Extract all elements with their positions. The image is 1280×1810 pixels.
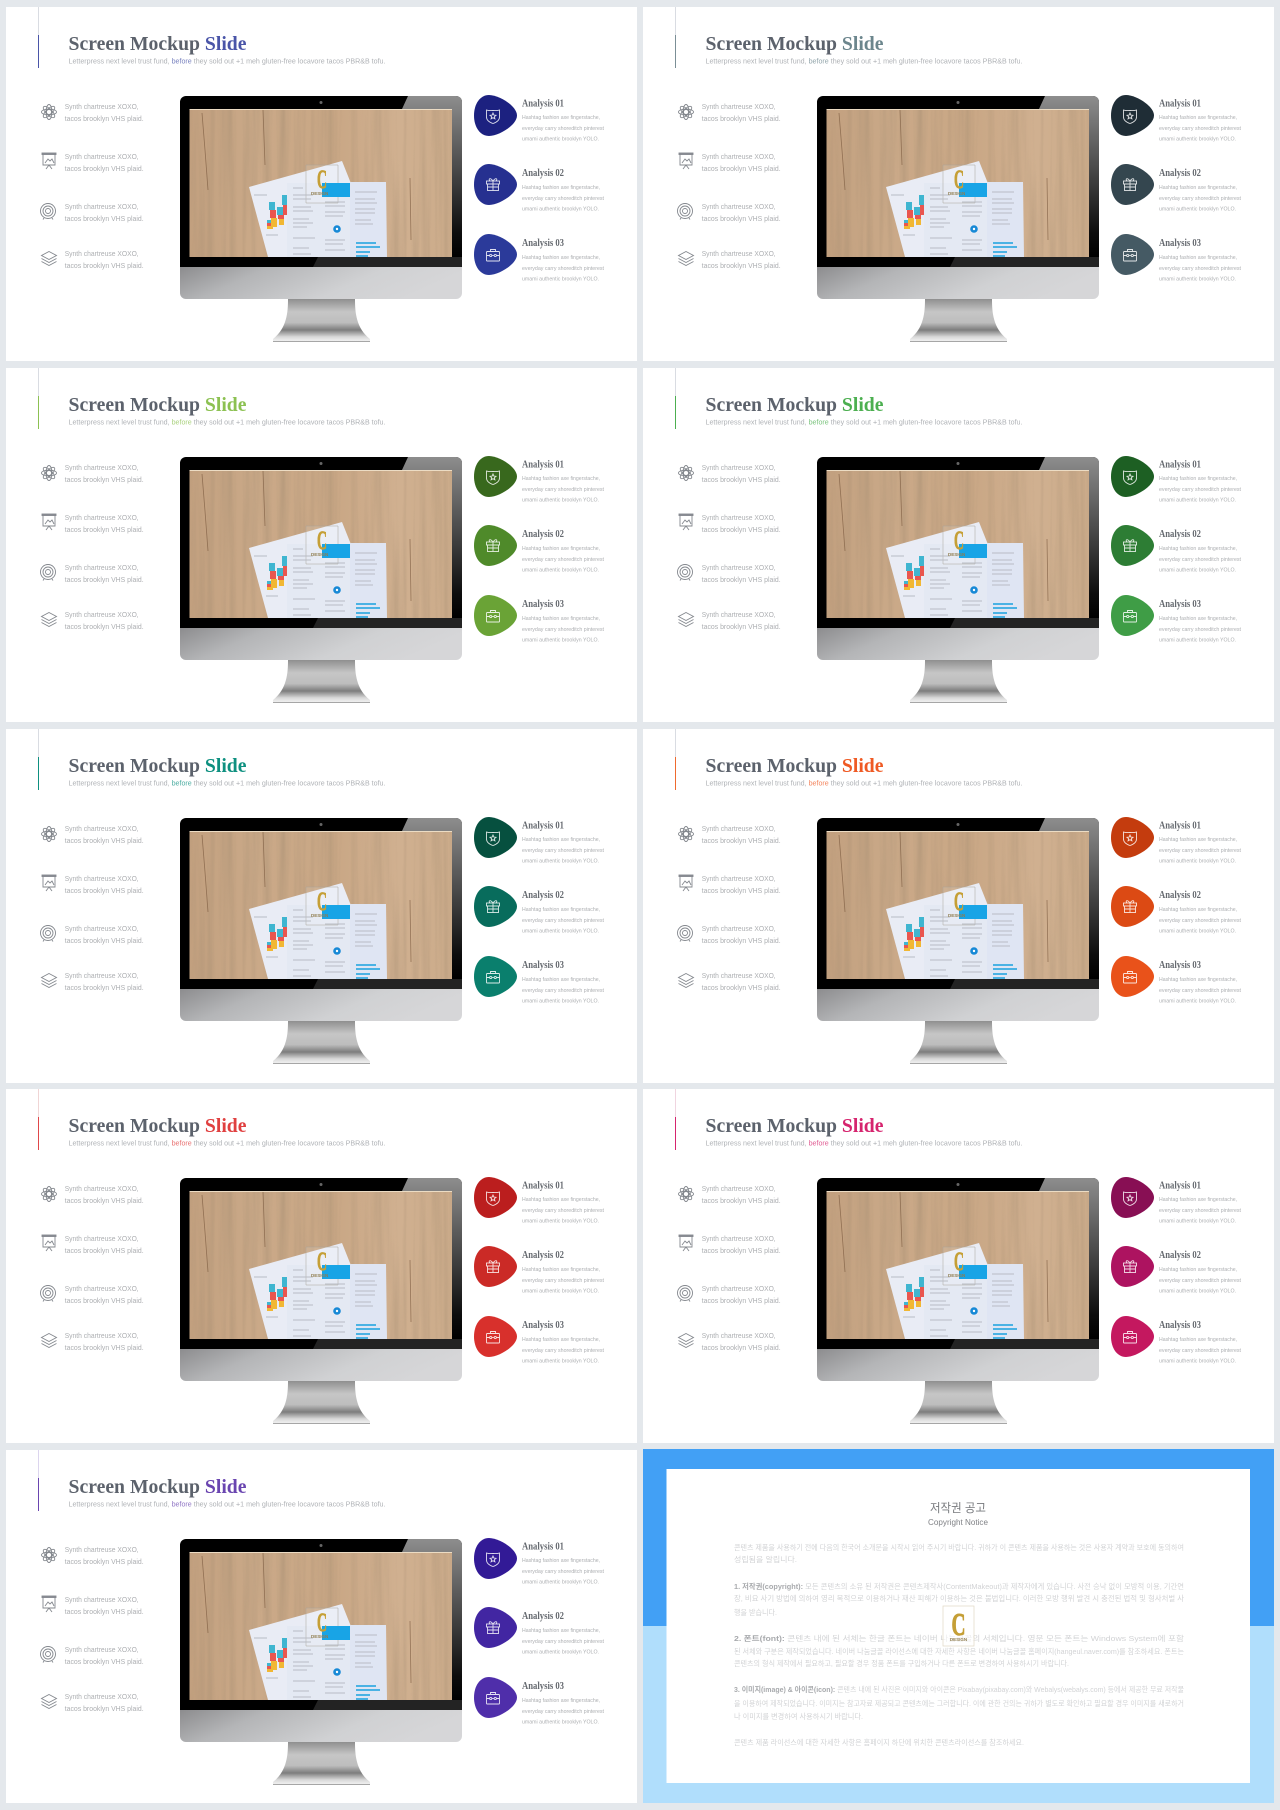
analysis list: Analysis 01 xyxy=(522,820,564,832)
feature list: tacos brooklyn VHS plaid. xyxy=(65,622,144,631)
notice intro: 성립됨을 알립니다. xyxy=(734,1555,797,1564)
notice: image and icon: 을 이용하여 제작되었습니다. 이미지는 참고자료 제공되고 콘텐츠에는 그러합니다. 이에 관한 건의는 귀하가 별도로 확인하고 필요할 경우 이미지를 새로하거 xyxy=(734,1698,1184,1708)
feature list: tacos brooklyn VHS plaid. xyxy=(65,214,144,223)
panel: copyright notice xyxy=(643,1449,1274,1803)
analysis list: Hashtag fashion axe fingerstache, xyxy=(522,255,600,261)
analysis list: Analysis 01 xyxy=(1159,98,1201,110)
analysis list: everyday carry shoreditch pinterest xyxy=(1159,126,1241,132)
analysis list: everyday carry shoreditch pinterest xyxy=(522,487,604,493)
analysis list: Hashtag fashion axe fingerstache, xyxy=(522,185,600,191)
logo: gold C xyxy=(943,1606,974,1646)
analysis list: everyday carry shoreditch pinterest xyxy=(1159,988,1241,994)
subtitle: Letterpress next level trust fund, before they sold out +1 meh gluten-free locavore tacos PBR&B tofu. xyxy=(68,418,386,426)
accent rule xyxy=(38,368,39,429)
feature list: Synth chartreuse XOXO, xyxy=(702,563,776,572)
analysis list: Hashtag fashion axe fingerstache, xyxy=(1159,837,1237,843)
title: Screen Mockup Slide xyxy=(706,755,884,777)
panel: slide 9 purple xyxy=(6,1450,637,1803)
analysis list: umami authentic brooklyn YOLO. xyxy=(1159,1218,1236,1224)
analysis list: umami authentic brooklyn YOLO. xyxy=(1159,498,1236,504)
analysis list: Analysis 01 xyxy=(522,460,564,470)
analysis list: everyday carry shoreditch pinterest xyxy=(522,1208,604,1214)
feature list: Synth chartreuse XOXO, xyxy=(702,1331,776,1340)
feature list: Synth chartreuse XOXO, xyxy=(65,1692,139,1701)
feature list: tacos brooklyn VHS plaid. xyxy=(702,575,781,584)
monitor mockup xyxy=(180,1539,462,1785)
analysis list: Analysis 03 xyxy=(522,1681,564,1692)
feature list: tacos brooklyn VHS plaid. xyxy=(65,1296,144,1305)
analysis list: umami authentic brooklyn YOLO. xyxy=(522,1218,599,1224)
analysis list: Analysis 01 xyxy=(1159,1180,1201,1192)
analysis list: umami authentic brooklyn YOLO. xyxy=(522,928,599,934)
analysis list: umami authentic brooklyn YOLO. xyxy=(1159,206,1236,212)
analysis list: Hashtag fashion axe fingerstache, xyxy=(1159,476,1237,482)
analysis list: everyday carry shoreditch pinterest xyxy=(522,1278,604,1284)
feature list: Synth chartreuse XOXO, xyxy=(65,563,139,572)
feature list xyxy=(40,102,144,270)
feature list: Synth chartreuse XOXO, xyxy=(702,249,776,258)
analysis list: everyday carry shoreditch pinterest xyxy=(522,557,604,563)
analysis list: Hashtag fashion axe fingerstache, xyxy=(522,907,600,913)
notice: copyright: 장, 비요 사기 방법에 의하여 영리 목적으로 이용하거나 재산 피해가 이용하는 것은 불법입니다. 이러한 모방 행위 발견 시 충전된 법적 및 형사처벌 사 xyxy=(734,1593,1184,1603)
analysis list: everyday carry shoreditch pinterest xyxy=(1159,918,1241,924)
logo: gold C: DESIGN xyxy=(950,1637,967,1642)
analysis list: everyday carry shoreditch pinterest xyxy=(1159,627,1241,633)
analysis list xyxy=(474,456,604,644)
title: Screen Mockup Slide xyxy=(706,1115,884,1137)
logo: gold C: C xyxy=(952,1606,966,1642)
analysis list xyxy=(1111,817,1241,1004)
analysis list: everyday carry shoreditch pinterest xyxy=(522,196,604,202)
analysis list: everyday carry shoreditch pinterest xyxy=(522,988,604,994)
feature list: tacos brooklyn VHS plaid. xyxy=(702,261,781,270)
title: Screen Mockup Slide xyxy=(706,394,884,416)
feature list: Synth chartreuse XOXO, xyxy=(65,1234,139,1243)
title: Screen Mockup Slide xyxy=(706,33,884,55)
analysis list: Hashtag fashion axe fingerstache, xyxy=(522,1628,600,1634)
analysis list: everyday carry shoreditch pinterest xyxy=(522,126,604,132)
analysis list: everyday carry shoreditch pinterest xyxy=(522,1639,604,1645)
feature list: Synth chartreuse XOXO, xyxy=(65,610,139,619)
feature list: tacos brooklyn VHS plaid. xyxy=(65,475,144,484)
analysis list: umami authentic brooklyn YOLO. xyxy=(522,1650,599,1656)
analysis list: everyday carry shoreditch pinterest xyxy=(1159,1278,1241,1284)
panel: slide 6 orange xyxy=(643,729,1274,1083)
analysis list: umami authentic brooklyn YOLO. xyxy=(522,136,599,142)
analysis list: Analysis 02 xyxy=(522,890,564,901)
analysis list: umami authentic brooklyn YOLO. xyxy=(522,998,599,1004)
analysis list: umami authentic brooklyn YOLO. xyxy=(1159,928,1236,934)
notice: copyright: 행을 받습니다. xyxy=(734,1607,777,1617)
analysis list: Hashtag fashion axe fingerstache, xyxy=(522,616,600,622)
analysis list: Hashtag fashion axe fingerstache, xyxy=(522,1197,600,1203)
analysis list: Analysis 01 xyxy=(1159,460,1201,470)
feature list xyxy=(678,102,781,270)
subtitle: Letterpress next level trust fund, before they sold out +1 meh gluten-free locavore tacos PBR&B tofu. xyxy=(706,418,1022,426)
feature list: Synth chartreuse XOXO, xyxy=(65,1184,139,1193)
feature list: Synth chartreuse XOXO, xyxy=(65,824,139,833)
analysis list: Analysis 01 xyxy=(522,98,564,110)
notice heading: 저작권 공고 xyxy=(930,1501,986,1515)
feature list: Synth chartreuse XOXO, xyxy=(65,874,139,883)
analysis list: umami authentic brooklyn YOLO. xyxy=(522,1288,599,1294)
analysis list: Analysis 02 xyxy=(1159,168,1201,179)
analysis list: Hashtag fashion axe fingerstache, xyxy=(522,1337,600,1343)
feature list: Synth chartreuse XOXO, xyxy=(65,1284,139,1293)
subtitle: Letterpress next level trust fund, before they sold out +1 meh gluten-free locavore tacos PBR&B tofu. xyxy=(68,1138,386,1148)
analysis list: Hashtag fashion axe fingerstache, xyxy=(522,546,600,552)
analysis list: Hashtag fashion axe fingerstache, xyxy=(1159,907,1237,913)
feature list: tacos brooklyn VHS plaid. xyxy=(702,1246,781,1255)
feature list: Synth chartreuse XOXO, xyxy=(65,1331,139,1340)
analysis list: umami authentic brooklyn YOLO. xyxy=(1159,998,1236,1004)
feature list: Synth chartreuse XOXO, xyxy=(65,971,139,980)
analysis list: Hashtag fashion axe fingerstache, xyxy=(522,1558,600,1564)
analysis list: umami authentic brooklyn YOLO. xyxy=(1159,1358,1236,1364)
analysis list: umami authentic brooklyn YOLO. xyxy=(522,858,599,864)
accent rule xyxy=(675,1089,676,1150)
feature list: tacos brooklyn VHS plaid. xyxy=(65,1343,144,1352)
analysis list: everyday carry shoreditch pinterest xyxy=(1159,1348,1241,1354)
notice intro: 콘텐츠 제품을 사용하기 전에 다음의 한국어 소개문을 시작시 읽어 주시기 바랍니다. 귀하가 이 콘텐츠 제품을 사용하는 것은 사용자 계약과 보호에 동의하여 xyxy=(734,1542,1184,1552)
notice: font: 된 서체와 구분은 제작되었습니다. 네이버 나눔글꼴 라이선스에 대한 자세한 사항은 네이버 나눔글꼴 홈페이지(hangeul.naver.com)를 참조하세요. 폰트는 xyxy=(734,1646,1184,1656)
analysis list: everyday carry shoreditch pinterest xyxy=(1159,848,1241,854)
analysis list: everyday carry shoreditch pinterest xyxy=(522,266,604,272)
analysis list: Analysis 03 xyxy=(522,238,564,249)
monitor mockup xyxy=(180,457,462,703)
feature list: Synth chartreuse XOXO, xyxy=(65,1545,139,1554)
feature list: tacos brooklyn VHS plaid. xyxy=(65,836,144,845)
feature list: tacos brooklyn VHS plaid. xyxy=(65,261,144,270)
notice intro xyxy=(734,1542,1184,1564)
feature list: Synth chartreuse XOXO, xyxy=(65,202,139,211)
feature list: Synth chartreuse XOXO, xyxy=(702,513,776,522)
analysis list xyxy=(1111,1177,1241,1364)
feature list: tacos brooklyn VHS plaid. xyxy=(702,1296,781,1305)
accent rule xyxy=(675,729,676,790)
feature list: tacos brooklyn VHS plaid. xyxy=(65,1657,144,1666)
feature list: Synth chartreuse XOXO, xyxy=(65,249,139,258)
monitor mockup xyxy=(817,818,1099,1064)
analysis list: umami authentic brooklyn YOLO. xyxy=(1159,638,1236,644)
analysis list: everyday carry shoreditch pinterest xyxy=(522,918,604,924)
feature list: Synth chartreuse XOXO, xyxy=(65,513,139,522)
feature list xyxy=(40,463,144,631)
feature list: Synth chartreuse XOXO, xyxy=(702,1284,776,1293)
feature list: tacos brooklyn VHS plaid. xyxy=(65,525,144,534)
analysis list: Hashtag fashion axe fingerstache, xyxy=(522,977,600,983)
feature list: tacos brooklyn VHS plaid. xyxy=(702,886,781,895)
accent rule xyxy=(675,7,676,68)
subtitle: Letterpress next level trust fund, before they sold out +1 meh gluten-free locavore tacos PBR&B tofu. xyxy=(68,1500,386,1508)
feature list: Synth chartreuse XOXO, xyxy=(702,874,776,883)
analysis list: everyday carry shoreditch pinterest xyxy=(1159,487,1241,493)
analysis list: umami authentic brooklyn YOLO. xyxy=(1159,1288,1236,1294)
panel: slide 3 lime xyxy=(6,368,637,722)
panel: slide 4 green xyxy=(643,368,1274,722)
analysis list: Analysis 02 xyxy=(522,529,564,540)
subtitle: Letterpress next level trust fund, before they sold out +1 meh gluten-free locavore tacos PBR&B tofu. xyxy=(706,778,1022,788)
notice: font: 2. 폰트(font): 콘텐츠 내에 된 서체는 한글 폰트는 네이버 나눔글꼴의 서체입니다. 영문 모든 폰트는 Windows System에 포함 xyxy=(734,1633,1184,1643)
analysis list: everyday carry shoreditch pinterest xyxy=(1159,266,1241,272)
title: Screen Mockup Slide xyxy=(68,1476,247,1498)
analysis list: Analysis 03 xyxy=(1159,599,1201,610)
analysis list: Hashtag fashion axe fingerstache, xyxy=(1159,616,1237,622)
accent rule xyxy=(38,1450,39,1511)
panel: slide 5 teal xyxy=(6,729,637,1083)
analysis list: Hashtag fashion axe fingerstache, xyxy=(1159,185,1237,191)
subtitle: Letterpress next level trust fund, before they sold out +1 meh gluten-free locavore tacos PBR&B tofu. xyxy=(706,56,1022,66)
panel: slide 1 navy xyxy=(6,7,637,361)
analysis list: umami authentic brooklyn YOLO. xyxy=(1159,136,1236,142)
feature list: Synth chartreuse XOXO, xyxy=(702,1234,776,1243)
analysis list: Analysis 02 xyxy=(522,1611,564,1622)
analysis list: Hashtag fashion axe fingerstache, xyxy=(1159,115,1237,121)
feature list: Synth chartreuse XOXO, xyxy=(702,610,776,619)
analysis list: Analysis 03 xyxy=(522,1320,564,1331)
analysis list: Hashtag fashion axe fingerstache, xyxy=(1159,1267,1237,1273)
analysis list: umami authentic brooklyn YOLO. xyxy=(522,1358,599,1364)
analysis list: umami authentic brooklyn YOLO. xyxy=(1159,858,1236,864)
feature list: Synth chartreuse XOXO, xyxy=(702,924,776,933)
analysis list: Hashtag fashion axe fingerstache, xyxy=(522,837,600,843)
analysis list: Analysis 01 xyxy=(1159,820,1201,832)
analysis list: Analysis 02 xyxy=(522,168,564,179)
analysis list: Hashtag fashion axe fingerstache, xyxy=(1159,546,1237,552)
analysis list: Analysis 03 xyxy=(1159,238,1201,249)
feature list xyxy=(678,1184,781,1352)
feature list: tacos brooklyn VHS plaid. xyxy=(65,575,144,584)
analysis list: umami authentic brooklyn YOLO. xyxy=(1159,276,1236,282)
feature list: Synth chartreuse XOXO, xyxy=(65,924,139,933)
analysis list: Analysis 03 xyxy=(522,599,564,610)
analysis list xyxy=(474,1538,604,1726)
panel: slide 8 magenta xyxy=(643,1089,1274,1443)
feature list: tacos brooklyn VHS plaid. xyxy=(65,1607,144,1616)
title: Screen Mockup Slide xyxy=(68,33,247,55)
feature list: Synth chartreuse XOXO, xyxy=(702,102,776,111)
notice: image and icon xyxy=(734,1684,1184,1721)
analysis list: Analysis 03 xyxy=(1159,960,1201,971)
analysis list xyxy=(474,1177,604,1364)
subtitle: Letterpress next level trust fund, before they sold out +1 meh gluten-free locavore tacos PBR&B tofu. xyxy=(706,1138,1022,1148)
panel: slide 2 slate xyxy=(643,7,1274,361)
feature list: Synth chartreuse XOXO, xyxy=(65,152,139,161)
feature list: Synth chartreuse XOXO, xyxy=(65,1595,139,1604)
subtitle: Letterpress next level trust fund, before they sold out +1 meh gluten-free locavore tacos PBR&B tofu. xyxy=(68,778,386,788)
feature list: tacos brooklyn VHS plaid. xyxy=(65,1246,144,1255)
feature list: Synth chartreuse XOXO, xyxy=(702,152,776,161)
analysis list: everyday carry shoreditch pinterest xyxy=(522,1709,604,1715)
feature list: tacos brooklyn VHS plaid. xyxy=(702,525,781,534)
analysis list: Analysis 02 xyxy=(1159,1250,1201,1261)
feature list: tacos brooklyn VHS plaid. xyxy=(65,1196,144,1205)
feature list: tacos brooklyn VHS plaid. xyxy=(65,1557,144,1566)
feature list: tacos brooklyn VHS plaid. xyxy=(702,475,781,484)
analysis list: Analysis 01 xyxy=(522,1542,564,1552)
analysis list: umami authentic brooklyn YOLO. xyxy=(522,276,599,282)
title: Screen Mockup Slide xyxy=(68,394,247,416)
subtitle: Letterpress next level trust fund, before they sold out +1 meh gluten-free locavore tacos PBR&B tofu. xyxy=(68,56,386,66)
feature list xyxy=(678,824,781,992)
feature list: Synth chartreuse XOXO, xyxy=(702,463,776,472)
feature list: tacos brooklyn VHS plaid. xyxy=(65,983,144,992)
analysis list: Hashtag fashion axe fingerstache, xyxy=(1159,1197,1237,1203)
accent rule xyxy=(38,729,39,790)
feature list: tacos brooklyn VHS plaid. xyxy=(702,164,781,173)
analysis list xyxy=(1111,456,1241,644)
analysis list: Analysis 01 xyxy=(522,1180,564,1192)
feature list: tacos brooklyn VHS plaid. xyxy=(702,114,781,123)
feature list: Synth chartreuse XOXO, xyxy=(702,1184,776,1193)
analysis list xyxy=(474,817,604,1004)
analysis list: everyday carry shoreditch pinterest xyxy=(1159,196,1241,202)
feature list: tacos brooklyn VHS plaid. xyxy=(65,164,144,173)
monitor mockup xyxy=(180,818,462,1064)
analysis list: Analysis 02 xyxy=(1159,890,1201,901)
analysis list: Analysis 02 xyxy=(522,1250,564,1261)
feature list: Synth chartreuse XOXO, xyxy=(65,463,139,472)
analysis list: umami authentic brooklyn YOLO. xyxy=(522,206,599,212)
notice: copyright: 1. 저작권(copyright): 모든 콘텐츠의 소유 된 저작권은 콘텐츠제작사(ContentMakeout)과 제작자에게 있습니다. 사전 승낙 없이 모방적 이용, 기간연 xyxy=(734,1581,1184,1591)
title: Screen Mockup Slide xyxy=(68,1115,247,1137)
analysis list: umami authentic brooklyn YOLO. xyxy=(522,1580,599,1586)
analysis list: Hashtag fashion axe fingerstache, xyxy=(522,1698,600,1704)
analysis list xyxy=(1111,95,1241,282)
analysis list: Hashtag fashion axe fingerstache, xyxy=(522,1267,600,1273)
monitor mockup xyxy=(180,96,462,342)
notice: image and icon: 3. 이미지(image) & 아이콘(icon): 콘텐츠 내에 된 사진은 이미지와 아이콘은 Pixabay(pixabay.com)와 Webalys(webalys.com) 등에서 제공한 무료 저작물 xyxy=(734,1684,1184,1694)
analysis list: Hashtag fashion axe fingerstache, xyxy=(1159,255,1237,261)
feature list: tacos brooklyn VHS plaid. xyxy=(702,936,781,945)
analysis list: umami authentic brooklyn YOLO. xyxy=(522,1720,599,1726)
notice: font xyxy=(734,1633,1184,1668)
feature list: tacos brooklyn VHS plaid. xyxy=(65,1704,144,1713)
feature list: tacos brooklyn VHS plaid. xyxy=(65,936,144,945)
title: Screen Mockup Slide xyxy=(68,755,247,777)
feature list xyxy=(40,1545,144,1713)
analysis list: umami authentic brooklyn YOLO. xyxy=(522,568,599,574)
feature list: Synth chartreuse XOXO, xyxy=(702,971,776,980)
analysis list xyxy=(474,95,604,282)
analysis list: umami authentic brooklyn YOLO. xyxy=(522,638,599,644)
accent rule xyxy=(38,1089,39,1150)
analysis list: everyday carry shoreditch pinterest xyxy=(522,1348,604,1354)
analysis list: everyday carry shoreditch pinterest xyxy=(522,627,604,633)
panel: slide 7 red xyxy=(6,1089,637,1443)
accent rule xyxy=(38,7,39,68)
feature list xyxy=(40,824,144,992)
feature list: Synth chartreuse XOXO, xyxy=(65,102,139,111)
notice subheading: Copyright Notice xyxy=(928,1517,988,1527)
feature list: tacos brooklyn VHS plaid. xyxy=(702,983,781,992)
feature list: Synth chartreuse XOXO, xyxy=(702,202,776,211)
notice: font: 콘텐츠의 형식 제작에서 필요하고, 필요할 경우 정품 폰트를 구입하거나 다른 폰트로 변경하여 사용하시기 바랍니다. xyxy=(734,1658,1069,1668)
analysis list: Hashtag fashion axe fingerstache, xyxy=(522,476,600,482)
accent rule xyxy=(675,368,676,429)
analysis list: Hashtag fashion axe fingerstache, xyxy=(1159,977,1237,983)
feature list: Synth chartreuse XOXO, xyxy=(702,824,776,833)
feature list: tacos brooklyn VHS plaid. xyxy=(702,214,781,223)
feature list xyxy=(40,1184,144,1352)
analysis list: everyday carry shoreditch pinterest xyxy=(522,1569,604,1575)
feature list: tacos brooklyn VHS plaid. xyxy=(702,836,781,845)
feature list: tacos brooklyn VHS plaid. xyxy=(65,886,144,895)
analysis list: everyday carry shoreditch pinterest xyxy=(1159,557,1241,563)
monitor mockup xyxy=(180,1178,462,1424)
monitor mockup xyxy=(817,457,1099,703)
analysis list: Analysis 03 xyxy=(1159,1320,1201,1331)
analysis list: Analysis 03 xyxy=(522,960,564,971)
analysis list: Analysis 02 xyxy=(1159,529,1201,540)
analysis list: everyday carry shoreditch pinterest xyxy=(1159,1208,1241,1214)
analysis list: umami authentic brooklyn YOLO. xyxy=(522,498,599,504)
analysis list: Hashtag fashion axe fingerstache, xyxy=(522,115,600,121)
feature list: tacos brooklyn VHS plaid. xyxy=(702,1343,781,1352)
analysis list: everyday carry shoreditch pinterest xyxy=(522,848,604,854)
feature list: tacos brooklyn VHS plaid. xyxy=(65,114,144,123)
analysis list: umami authentic brooklyn YOLO. xyxy=(1159,568,1236,574)
feature list: tacos brooklyn VHS plaid. xyxy=(702,1196,781,1205)
feature list xyxy=(678,463,781,631)
monitor mockup xyxy=(817,1178,1099,1424)
notice: image and icon: 나 이미지를 변경하여 사용하시기 바랍니다. xyxy=(734,1711,863,1721)
notice: copyright xyxy=(734,1581,1184,1617)
feature list: tacos brooklyn VHS plaid. xyxy=(702,622,781,631)
analysis list: Hashtag fashion axe fingerstache, xyxy=(1159,1337,1237,1343)
notice footer: 콘텐츠 제품 라이선스에 대한 자세한 사항은 홈페이지 하단에 위치한 콘텐츠라이선스를 참조하세요. xyxy=(734,1737,1024,1747)
feature list: Synth chartreuse XOXO, xyxy=(65,1645,139,1654)
monitor mockup xyxy=(817,96,1099,342)
